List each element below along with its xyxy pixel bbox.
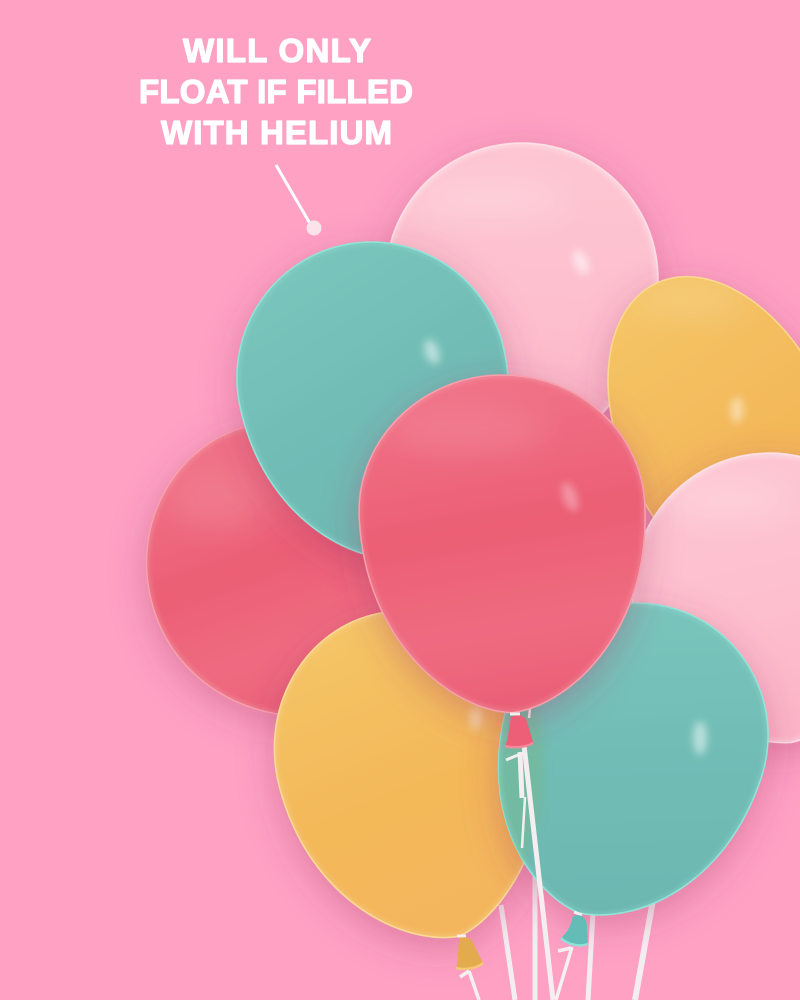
knot: red balloon <box>505 714 533 748</box>
callout: helium note <box>139 32 413 236</box>
balloon: pink top <box>382 140 670 421</box>
balloon: red left <box>134 426 382 735</box>
balloon: yellow right <box>594 270 800 529</box>
strings <box>501 870 653 1000</box>
knot: yellow balloon <box>456 936 483 1000</box>
heading <box>139 32 413 151</box>
balloon: pink right <box>632 448 800 764</box>
front strings <box>506 708 553 1000</box>
heading: WILL ONLY <box>183 32 371 69</box>
knot: teal balloon <box>556 912 588 1000</box>
heading: WITH HELIUM <box>161 114 392 151</box>
balloon: red centre <box>352 368 655 720</box>
arrow: pointer line <box>276 165 312 227</box>
balloon: yellow bottom <box>262 612 537 960</box>
balloon: teal top <box>224 232 522 570</box>
heading: FLOAT IF FILLED <box>139 73 413 110</box>
pointer dot <box>306 220 322 236</box>
balloon: teal bottom <box>484 598 790 946</box>
